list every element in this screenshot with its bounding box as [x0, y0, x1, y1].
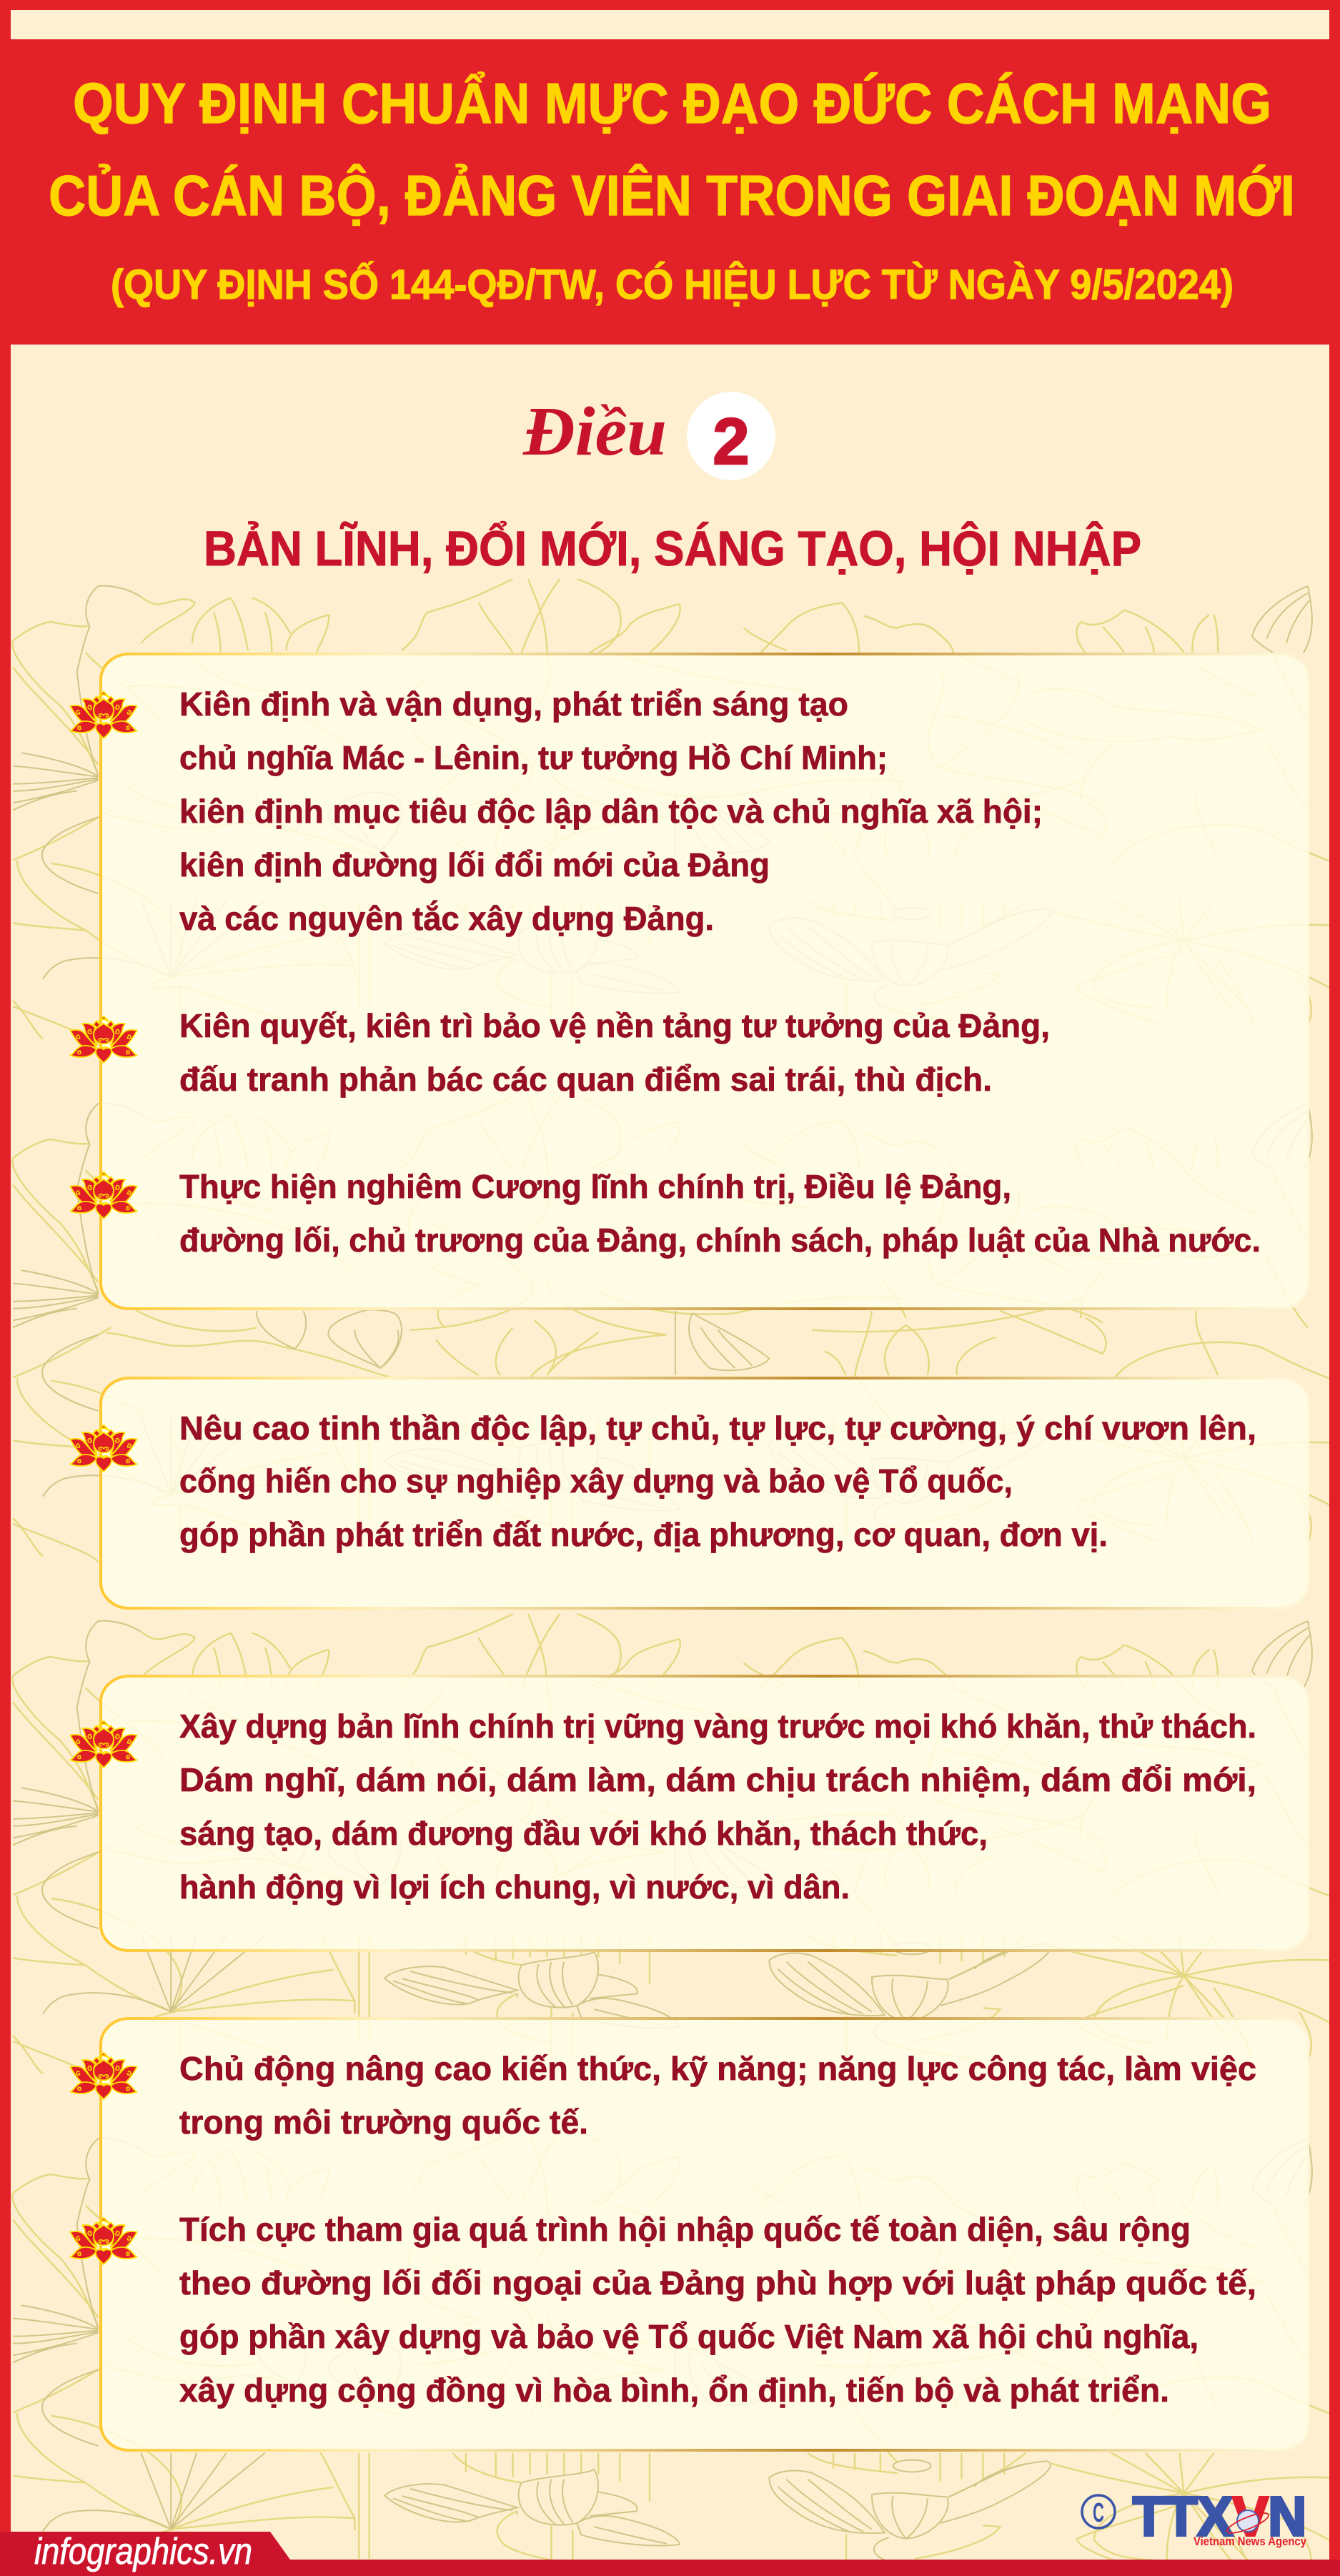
- item 2 text: đấu tranh phản bác các quan điểm sai trái, thù địch.: [179, 1061, 992, 1098]
- item 5 text: hành động vì lợi ích chung, vì nước, vì dân.: [179, 1868, 850, 1906]
- top cream strip: [11, 10, 1329, 39]
- logo: TTXVN Vietnam News Agency: TTXVN: [1133, 2486, 1306, 2547]
- item 3 text: [179, 1168, 1261, 1259]
- logo: TTXVN Vietnam News Agency: C: [1093, 2498, 1104, 2528]
- item 3 text: đường lối, chủ trương của Đảng, chính sách, pháp luật của Nhà nước.: [179, 1222, 1261, 1259]
- item 4 text: [179, 1410, 1256, 1553]
- title block: (QUY ĐỊNH SỐ 144-QĐ/TW, CÓ HIỆU LỰC TỪ NGÀY 9/5/2024): [111, 262, 1234, 308]
- item 5 text: Dám nghĩ, dám nói, dám làm, dám chịu trách nhiệm, dám đổi mới,: [179, 1761, 1256, 1798]
- bottom red bar: [0, 2560, 1340, 2576]
- item 5 text: sáng tạo, dám đương đầu với khó khăn, thách thức,: [179, 1815, 988, 1852]
- panel: card 3: [70, 1676, 1308, 1951]
- item 1 text: kiên định đường lối đổi mới của Đảng: [179, 846, 770, 883]
- logo: TTXVN Vietnam News Agency: Vietnam News Agency: [1193, 2535, 1306, 2548]
- icon: lotus bullet 2: [70, 1016, 137, 1063]
- subheading: BẢN LĨNH, ĐỔI MỚI, SÁNG TẠO, HỘI NHẬP: [204, 521, 1141, 576]
- item 1 text: Kiên định và vận dụng, phát triển sáng tạo: [179, 685, 848, 723]
- item 4 text: cống hiến cho sự nghiệp xây dựng và bảo vệ Tổ quốc,: [179, 1462, 1013, 1500]
- article heading: Điều 2: Điều: [522, 393, 667, 470]
- item 7 text: Tích cực tham gia quá trình hội nhập quốc tế toàn diện, sâu rộng: [179, 2211, 1191, 2248]
- title block: [49, 71, 1295, 308]
- item 5 text: Xây dựng bản lĩnh chính trị vững vàng trước mọi khó khăn, thử thách.: [179, 1708, 1256, 1745]
- item 6 text: [179, 2050, 1256, 2141]
- item 1 text: chủ nghĩa Mác - Lênin, tư tưởng Hồ Chí Minh;: [179, 739, 888, 776]
- item 2 text: Kiên quyết, kiên trì bảo vệ nền tảng tư tưởng của Đảng,: [179, 1007, 1050, 1044]
- icon: lotus bullet 5: [70, 1721, 137, 1768]
- icon: lotus bullet 4: [70, 1425, 137, 1472]
- panel: card 2: [70, 1378, 1308, 1608]
- item 1 text: và các nguyên tắc xây dựng Đảng.: [179, 900, 714, 937]
- panel: card 4: [70, 2018, 1308, 2450]
- item 2 text: [179, 1007, 1050, 1098]
- item 5 text: [179, 1708, 1256, 1906]
- item 1 text: kiên định mục tiêu độc lập dân tộc và chủ nghĩa xã hội;: [179, 793, 1043, 830]
- item 3 text: Thực hiện nghiêm Cương lĩnh chính trị, Điều lệ Đảng,: [179, 1168, 1011, 1205]
- item 6 text: Chủ động nâng cao kiến thức, kỹ năng; năng lực công tác, làm việc: [179, 2050, 1256, 2087]
- item 7 text: góp phần xây dựng và bảo vệ Tổ quốc Việt Nam xã hội chủ nghĩa,: [179, 2318, 1198, 2355]
- article heading: Điều 2: [522, 392, 775, 480]
- item 7 text: [179, 2211, 1256, 2409]
- icon: lotus bullet 3: [70, 1172, 137, 1219]
- item 7 text: theo đường lối đối ngoại của Đảng phù hợp với luật pháp quốc tế,: [179, 2264, 1256, 2302]
- item 6 text: trong môi trường quốc tế.: [179, 2104, 588, 2141]
- badge: infographics.vn: infographics.vn: [34, 2531, 252, 2572]
- icon: lotus bullet 6: [70, 2053, 137, 2099]
- item 4 text: góp phần phát triển đất nước, địa phương, cơ quan, đơn vị.: [179, 1516, 1108, 1553]
- icon: lotus bullet 1: [70, 692, 137, 738]
- icon: lotus bullet 7: [70, 2218, 137, 2264]
- item 4 text: Nêu cao tinh thần độc lập, tự chủ, tự lực, tự cường, ý chí vươn lên,: [179, 1410, 1256, 1447]
- item 1 text: [179, 685, 1043, 937]
- article heading: Điều 2: 2: [713, 405, 750, 478]
- panel: card 1: [70, 654, 1308, 1309]
- item 7 text: xây dựng cộng đồng vì hòa bình, ổn định, tiến bộ và phát triển.: [179, 2372, 1169, 2409]
